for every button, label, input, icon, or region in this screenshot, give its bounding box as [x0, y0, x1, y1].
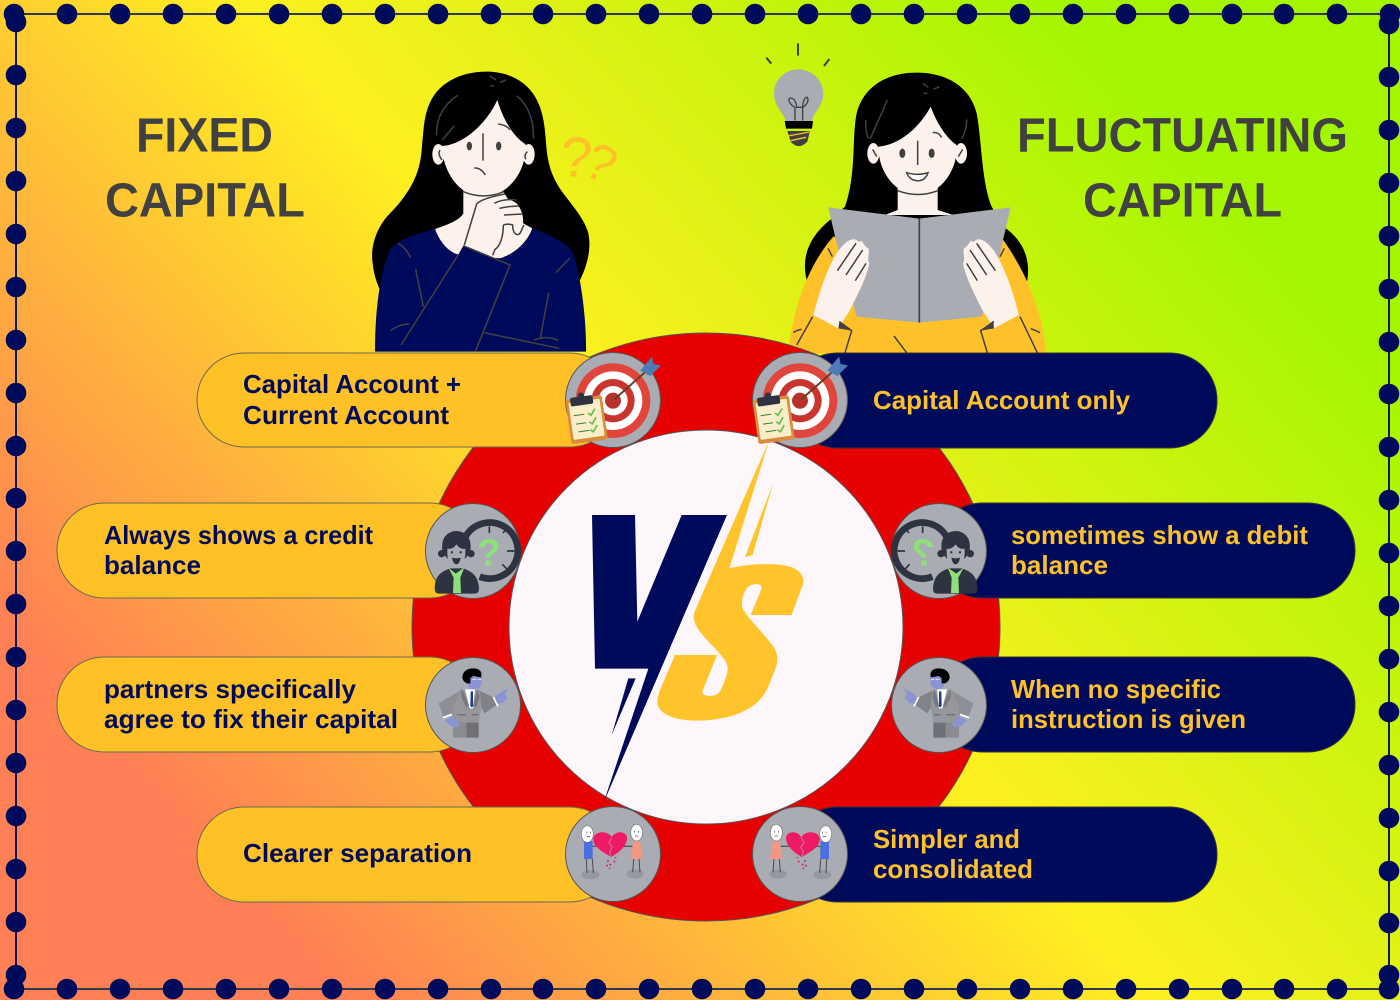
heading: fixed capital	[105, 108, 305, 228]
right pill: simpler and consolidated	[790, 807, 1217, 902]
heading: fluctuating capital: FLUCTUATING	[1017, 108, 1348, 162]
heading: fixed capital: FIXED	[136, 108, 273, 162]
icon: target and clipboard, right	[752, 352, 848, 448]
left pill: fix their capital	[57, 657, 477, 752]
left pill: credit balance: balance	[104, 550, 201, 580]
icon: light bulb	[766, 43, 829, 146]
left pill: capital account + current account: Capital Account +	[243, 369, 461, 399]
right pill: debit balance: balance	[1011, 550, 1108, 580]
left pill: credit balance	[57, 503, 477, 598]
icon: person and clock, right	[892, 504, 986, 598]
central red circle	[412, 333, 1000, 921]
illustration: thinking woman	[372, 72, 626, 352]
left pill: clearer separation	[197, 807, 617, 902]
heading: fixed capital: CAPITAL	[105, 174, 305, 228]
VS emblem	[592, 440, 803, 803]
S shard	[745, 483, 773, 557]
illustration: reading woman with book	[788, 73, 1046, 353]
central white circle	[509, 430, 903, 824]
right pill: no specific instruction	[935, 657, 1355, 752]
icon: target and clipboard, left	[565, 352, 661, 448]
heading: fluctuating capital	[1017, 108, 1348, 228]
icon: pointing man, left	[426, 658, 520, 752]
left pill: fix their capital: agree to fix their capital	[104, 704, 398, 734]
illustration: thinking woman: ?	[576, 130, 626, 195]
icon: person and clock, left	[426, 504, 520, 598]
icon: couple with broken heart, right	[752, 806, 848, 902]
right pill: debit balance: sometimes show a debit	[1011, 520, 1308, 550]
illustration: thinking woman: ?	[558, 125, 594, 191]
icon: pointing man, right	[892, 658, 986, 752]
right pill: capital account only	[790, 353, 1217, 448]
icon: couple with broken heart, left	[566, 806, 660, 902]
letter S	[657, 440, 803, 721]
right pill: capital account only: Capital Account only	[873, 385, 1131, 415]
right pill: debit balance	[935, 503, 1355, 598]
right pill: no specific instruction: When no specific	[1011, 674, 1221, 704]
right pill: simpler and consolidated: consolidated	[873, 854, 1033, 884]
right pill: no specific instruction: instruction is given	[1011, 704, 1246, 734]
left pill: fix their capital: partners specifically	[104, 674, 357, 704]
left pill: capital account + current account	[197, 353, 617, 447]
right pill: simpler and consolidated: Simpler and	[873, 824, 1020, 854]
heading: fluctuating capital: CAPITAL	[1083, 174, 1282, 228]
letter V	[592, 515, 727, 803]
V shard	[612, 678, 636, 735]
left pill: credit balance: Always shows a credit	[104, 520, 373, 550]
left pill: capital account + current account: Current Account	[243, 400, 449, 430]
left pill: clearer separation: Clearer separation	[243, 838, 472, 868]
